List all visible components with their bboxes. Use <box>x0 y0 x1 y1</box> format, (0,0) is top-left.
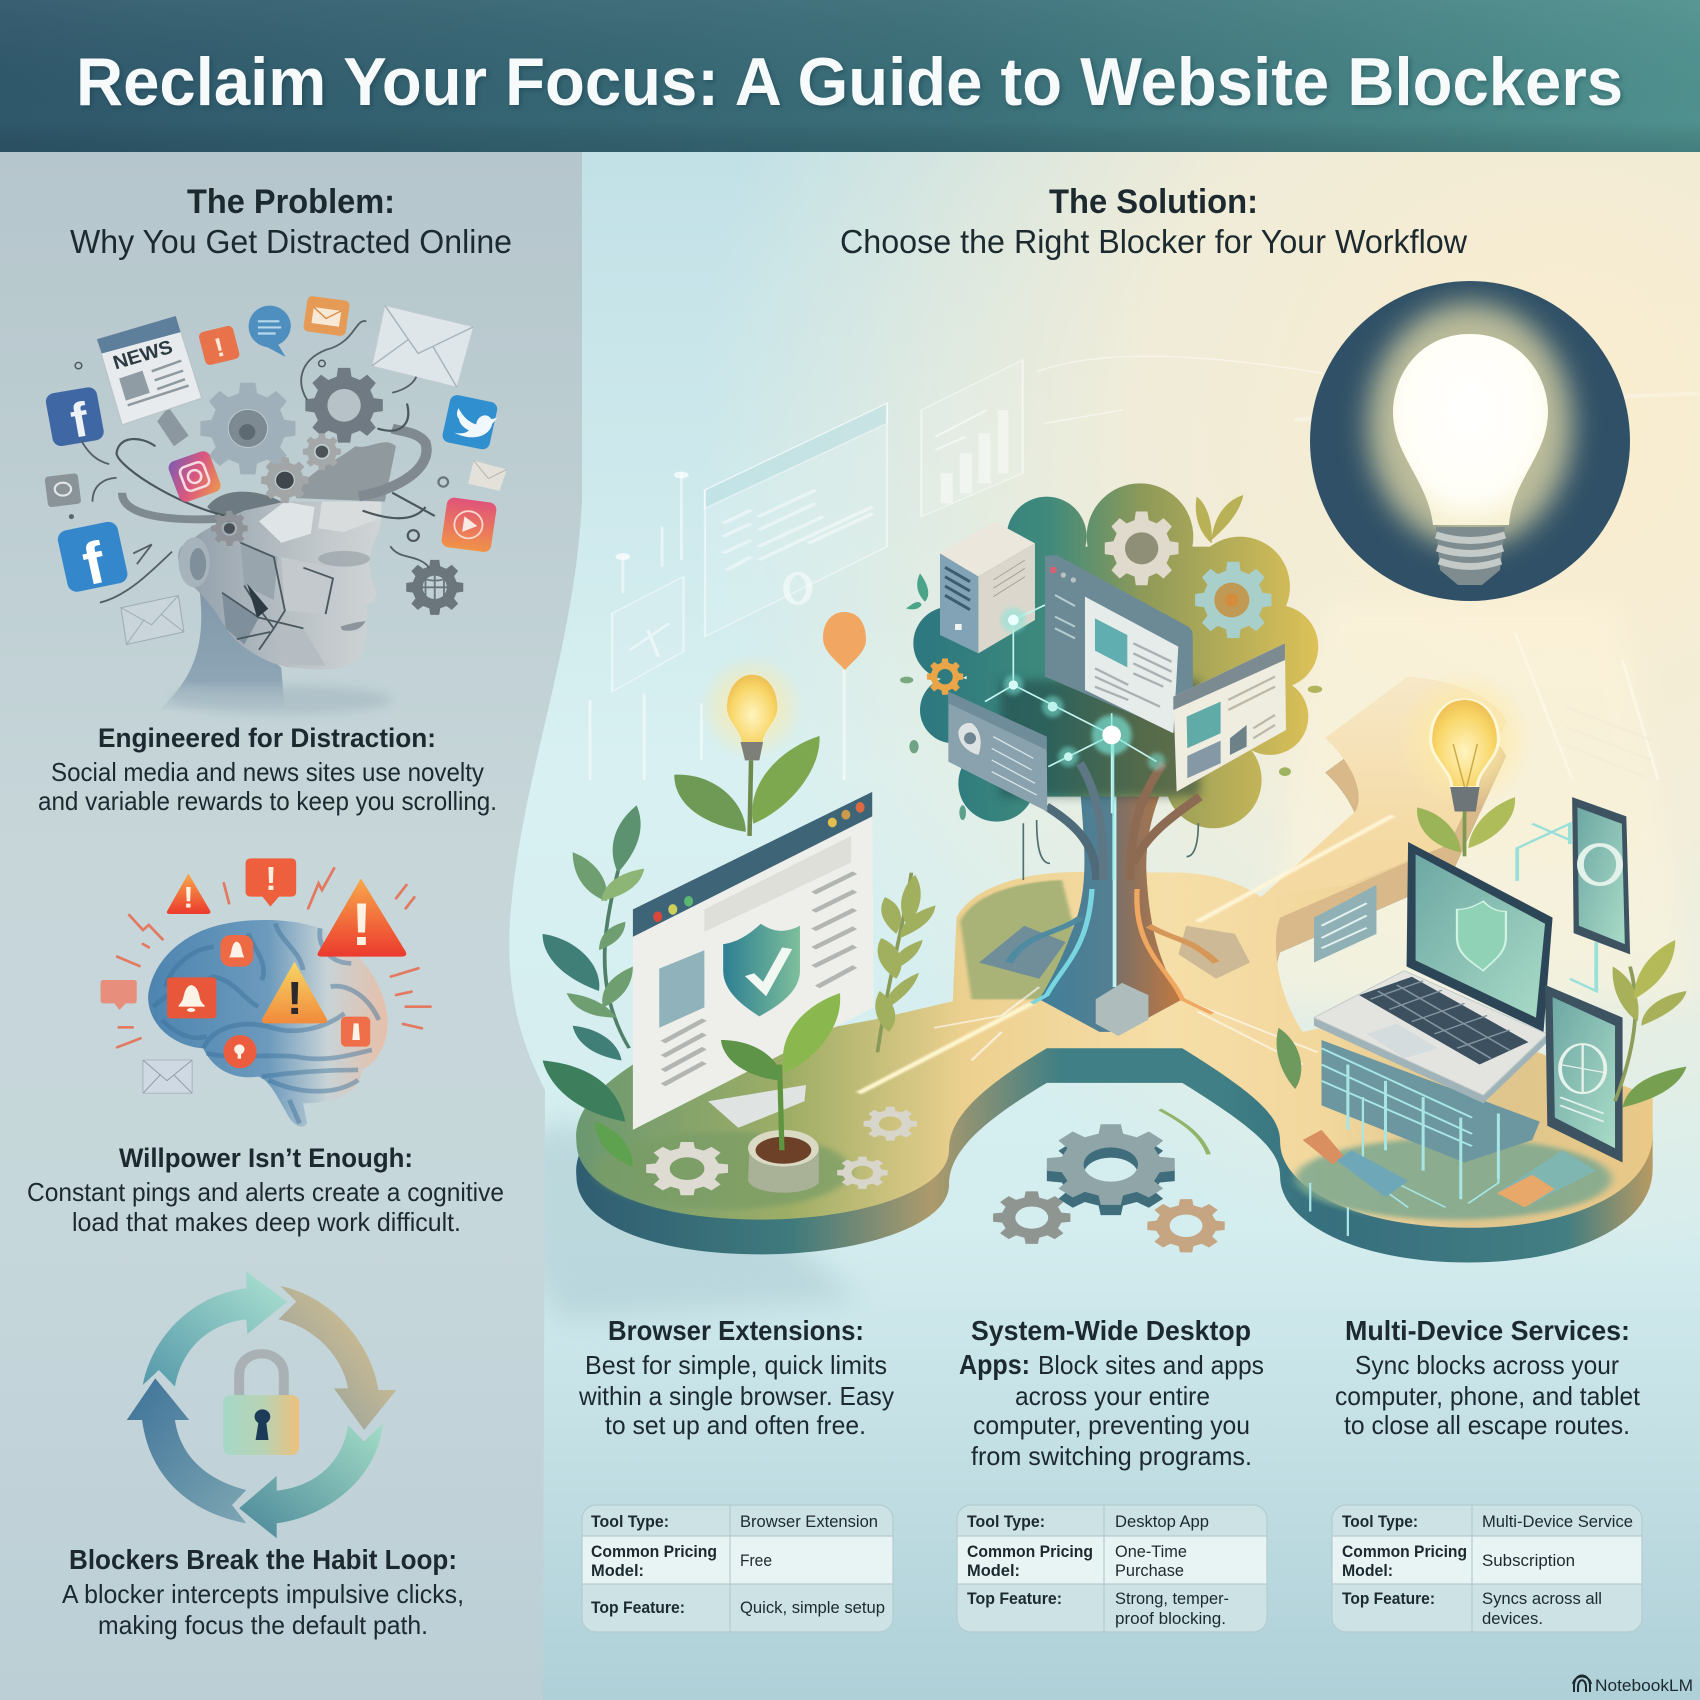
icon: video play <box>441 497 497 553</box>
icon: globe gear <box>406 560 463 615</box>
text block: browser extensions: to set up and often free. <box>605 1410 866 1440</box>
illustration: laptop on server stack <box>1303 797 1630 1236</box>
glowing road line left <box>859 1003 1032 1093</box>
notebooklm logo: NotebookLM <box>1595 1676 1693 1695</box>
icon: envelope <box>143 1060 192 1093</box>
illustration: large light bulb in dark circle <box>1260 281 1700 1000</box>
table: multi-device service: Tool Type: <box>1342 1512 1418 1531</box>
table: browser extension: Top Feature: <box>591 1598 685 1617</box>
icon: small warning triangle: ! <box>183 881 194 914</box>
table: multi-device service: Common Pricing <box>1342 1542 1467 1561</box>
icon: laptop <box>1314 842 1553 1103</box>
icon: alert speech bubble <box>246 858 296 907</box>
icon: outline envelope <box>121 596 184 644</box>
table: desktop app: Common Pricing <box>967 1542 1093 1561</box>
table: browser extension: Model: <box>591 1561 644 1580</box>
heading: the problem <box>70 183 512 260</box>
text block: browser extensions: within a single browser. Easy <box>578 1381 894 1411</box>
text block: system-wide desktop apps: across your entire <box>1015 1381 1210 1411</box>
network nodes <box>985 605 1165 813</box>
table: desktop app: Top Feature: <box>967 1589 1062 1608</box>
background: left problem panel <box>0 152 582 1700</box>
icon: brain warning triangle: ! <box>287 973 303 1025</box>
table: browser extension: Tool Type: <box>591 1512 669 1531</box>
illustration: seedling bulb left <box>674 654 820 836</box>
arrow: loop top-right <box>278 1286 396 1430</box>
text block: system-wide desktop apps: System-Wide Desktop <box>971 1315 1251 1346</box>
illustration: potted seedling <box>721 993 840 1193</box>
text block: system-wide desktop apps: computer, preventing you <box>973 1410 1250 1440</box>
text block: willpower isn't enough: load that makes deep work difficult. <box>72 1207 461 1237</box>
icon: faded speech bubble <box>101 980 137 1010</box>
heading: the solution: Choose the Right Blocker for Your Workflow <box>840 223 1467 260</box>
illustration: climbing vine left <box>543 805 644 1167</box>
table: desktop app: Desktop App <box>1115 1512 1209 1531</box>
icon: alert speech bubble: ! <box>265 860 277 898</box>
icon: shield check <box>723 924 800 1016</box>
icon: facebook upper: f <box>67 393 93 448</box>
icon: small screen panel <box>1314 885 1376 962</box>
heading: the solution <box>840 183 1467 260</box>
table: desktop app: Purchase <box>1115 1561 1184 1580</box>
icon: news window: NEWS <box>110 336 175 374</box>
icon: alert badge <box>198 325 240 366</box>
table: multi-device service: Top Feature: <box>1342 1589 1435 1608</box>
title banner: Reclaim Your Focus: A Guide to Website Blockers <box>78 46 1625 122</box>
text block: system-wide desktop apps: Block sites and apps <box>1038 1350 1264 1380</box>
icon: small devices <box>1303 1130 1596 1207</box>
table: multi-device service: devices. <box>1482 1609 1543 1628</box>
icon: browser extension window <box>633 792 874 1130</box>
text block: browser extensions <box>578 1315 894 1440</box>
table: multi-device service: Subscription <box>1482 1551 1575 1570</box>
icon: canopy gear blue <box>1195 562 1271 638</box>
icon: small mail <box>468 461 507 491</box>
icon: canopy gear cream <box>1105 511 1179 585</box>
text block: engineered for distraction: and variable rewards to keep you scrolling. <box>38 786 497 816</box>
heading: the problem: Why You Get Distracted Online <box>70 223 512 260</box>
icon: facebook upper <box>44 386 106 452</box>
icon: orange mail <box>303 295 350 337</box>
text block: blockers break the habit loop: Blockers Break the Habit Loop: <box>69 1544 457 1575</box>
table: desktop app: Tool Type: <box>967 1512 1045 1531</box>
icon: server box <box>940 522 1035 653</box>
icon: large warning triangle: ! <box>351 891 372 958</box>
tree branches <box>1047 730 1200 880</box>
icon: bulb badge <box>224 1035 257 1068</box>
illustration: habit loop with padlock <box>127 1272 396 1538</box>
tree canopy <box>913 483 1318 828</box>
arrow: loop bottom-right <box>239 1423 383 1538</box>
text block: multi-device services: computer, phone, and tablet <box>1335 1381 1641 1411</box>
icon: phone <box>1572 797 1630 954</box>
text block: browser extensions: Browser Extensions: <box>608 1315 864 1346</box>
text block: blockers break the habit loop: making focus the default path. <box>98 1610 428 1640</box>
text block: engineered for distraction: Engineered for Distraction: <box>98 723 436 753</box>
table: browser extension: Browser Extension <box>740 1512 878 1531</box>
text block: blockers break the habit loop <box>62 1544 464 1640</box>
icon: large envelope <box>372 305 474 387</box>
illustration: isometric platform with paths <box>543 654 1687 1263</box>
icon: canopy gear orange <box>927 659 963 695</box>
title banner <box>0 0 1700 152</box>
text block: multi-device services: Sync blocks across your <box>1355 1350 1619 1380</box>
icon: left window <box>948 692 1047 812</box>
illustration: fractured head with distractions <box>44 295 507 714</box>
faint interface panels and circuit lines <box>590 356 1700 780</box>
arrow: loop top-left <box>143 1272 287 1387</box>
heading: the problem: The Problem: <box>187 183 395 221</box>
illustration: tree crown with windows <box>900 483 1322 880</box>
icon: padlock <box>223 1354 299 1455</box>
text block: browser extensions: Best for simple, quick limits <box>585 1350 887 1380</box>
text block: system-wide desktop apps: Apps: <box>959 1349 1030 1380</box>
icon: bell badge <box>167 977 216 1018</box>
text block: willpower isn't enough: Constant pings and alerts create a cognitive <box>27 1177 504 1207</box>
table: browser extension: Common Pricing <box>591 1542 717 1561</box>
illustration: vine right <box>1277 940 1687 1107</box>
central tree roots and cables <box>979 722 1250 1036</box>
table: desktop app: Strong, temper- <box>1115 1589 1229 1608</box>
icon: small bell badge <box>220 935 253 967</box>
table: desktop app: One-Time <box>1115 1542 1187 1561</box>
icon: instagram <box>166 449 223 504</box>
icon: small warning triangle <box>167 873 211 914</box>
title: Reclaim Your Focus: A Guide to Website Blockers <box>76 44 1623 120</box>
arrow: loop bottom-left <box>127 1378 246 1523</box>
table: multi-device service: Multi-Device Service <box>1482 1512 1633 1531</box>
text block: multi-device services: Multi-Device Services: <box>1345 1315 1630 1346</box>
table: desktop app: Model: <box>967 1561 1020 1580</box>
text block: system-wide desktop apps <box>959 1315 1264 1471</box>
text block: multi-device services <box>1335 1315 1641 1440</box>
table: multi-device service: Syncs across all <box>1482 1589 1602 1608</box>
table: browser extension <box>582 1505 893 1632</box>
text block: engineered for distraction: Social media and news sites use novelty <box>51 757 484 787</box>
table: desktop app: proof blocking. <box>1115 1609 1226 1628</box>
table: multi-device service <box>1332 1505 1642 1632</box>
table: desktop app <box>957 1505 1267 1632</box>
icon: orange location pin <box>823 612 866 670</box>
illustration: vine beside browser <box>875 873 935 1052</box>
icon: facebook lower <box>56 520 131 602</box>
illustration: overloaded brain with alerts <box>101 858 431 1127</box>
text block: willpower isn't enough <box>27 1143 504 1237</box>
icon: facebook lower: f <box>77 529 112 598</box>
icon: alert badge: ! <box>211 332 228 363</box>
icon: exclamation badge <box>341 1017 370 1047</box>
icon: tablet <box>1545 985 1623 1162</box>
heading: the solution: The Solution: <box>1049 183 1258 221</box>
table: browser extension: Quick, simple setup <box>740 1598 885 1617</box>
text block: willpower isn't enough: Willpower Isn’t Enough: <box>119 1143 413 1173</box>
text block: blockers break the habit loop: A blocker intercepts impulsive clicks, <box>62 1579 464 1609</box>
illustration: bulb right with leaves <box>1397 671 1532 856</box>
icon: news window <box>97 316 202 425</box>
text block: system-wide desktop apps: from switching programs. <box>971 1441 1252 1471</box>
icon: chat bubble <box>249 306 291 357</box>
table: multi-device service: Model: <box>1342 1561 1393 1580</box>
illustration: platform gears <box>646 1107 917 1195</box>
text block: engineered for distraction <box>38 723 497 816</box>
icon: brain warning triangle <box>262 962 327 1025</box>
icon: large warning triangle <box>317 878 406 958</box>
table: browser extension: Free <box>740 1551 772 1570</box>
illustration: foreground gears <box>993 1109 1225 1252</box>
icon: main window <box>1045 555 1193 740</box>
icon: twitter <box>441 394 500 451</box>
icon: grey badge <box>44 473 81 507</box>
text block: multi-device services: to close all escape routes. <box>1344 1410 1630 1440</box>
icon: right window <box>1173 643 1286 792</box>
